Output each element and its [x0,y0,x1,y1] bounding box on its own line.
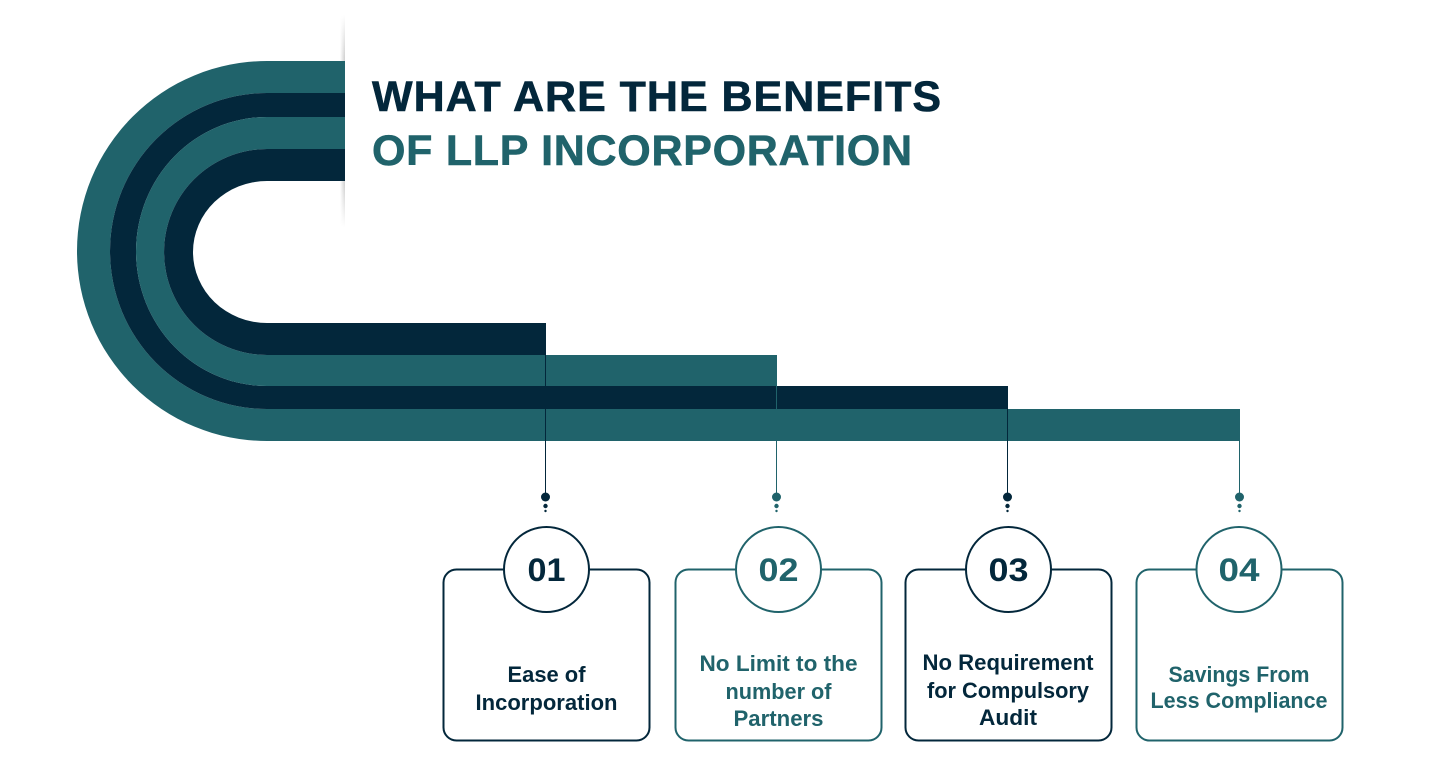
card 03 [906,527,1112,740]
card text: No Requirement [922,650,1094,675]
connector 01 [541,355,550,512]
number: 03 [988,552,1028,588]
card text: Partners [734,706,824,731]
title line 1: WHAT ARE THE BENEFITS [372,73,941,121]
card outline [444,570,650,740]
card text: Ease of [508,662,586,687]
title [372,73,941,175]
connector 02 [772,386,781,512]
stripe 2: teal to step 02 [136,117,777,386]
number: 04 [1218,552,1260,588]
card 01 [444,527,650,740]
number: 01 [528,552,566,588]
card text: number of [726,679,832,704]
card text: Audit [979,705,1038,730]
stripe 4: teal to step 04 [77,61,1240,441]
number: 02 [758,552,798,588]
fold shadow [340,15,345,227]
stripe 1: navy to step 01 [164,149,546,355]
title line 2: OF LLP INCORPORATION [372,127,912,175]
number badge [504,527,589,612]
card text: No Limit to the [700,651,858,676]
curved ribbon stripes [77,61,1240,441]
card text: for Compulsory [927,678,1090,703]
card 04 [1136,527,1342,740]
card text: Less Compliance [1150,688,1328,713]
number badge [736,527,821,612]
connector 04 [1235,441,1244,512]
card outline [1136,570,1342,740]
number badge [966,527,1051,612]
card 02 [676,527,882,740]
connector 03 [1003,409,1012,512]
card outline [676,570,882,740]
card text: Savings From [1168,662,1310,687]
number badge [1196,527,1282,612]
card text: Incorporation [476,690,618,715]
card outline [906,570,1112,740]
stripe 3: navy to step 03 [110,93,1008,409]
